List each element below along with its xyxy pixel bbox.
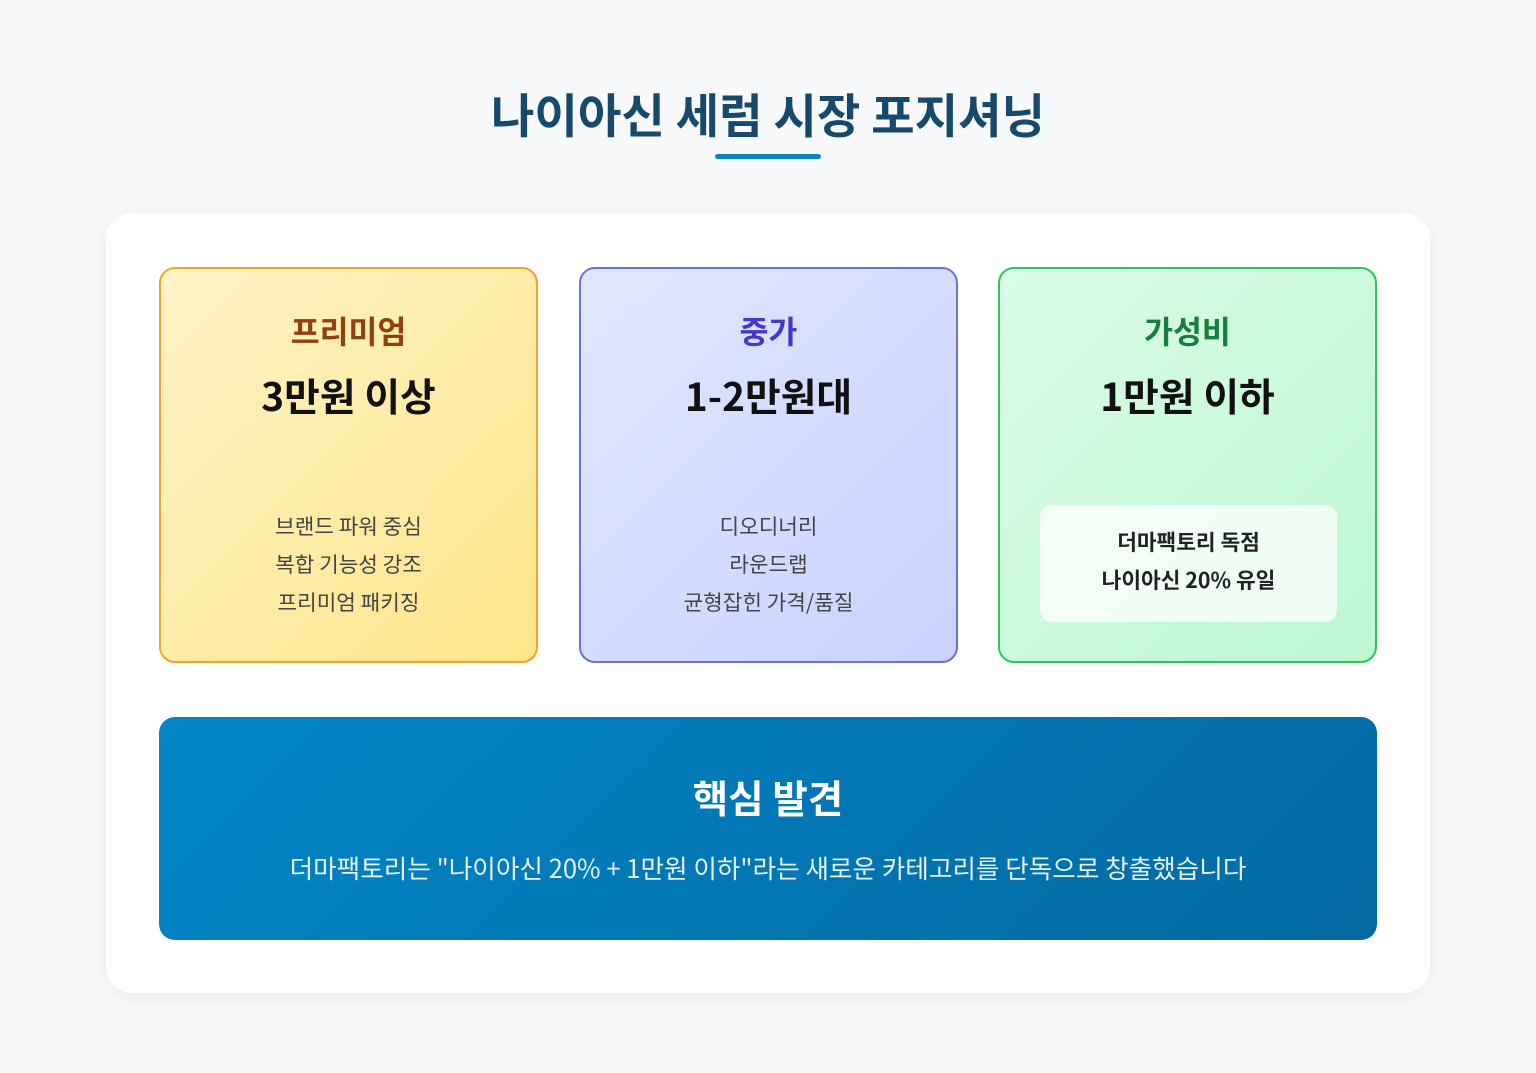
- card: premium: [159, 267, 538, 663]
- card: mid: 디오디너리: [720, 510, 817, 541]
- card: value: [998, 267, 1377, 663]
- banner: key finding: [159, 717, 1377, 940]
- card: premium: 프리미엄: [291, 308, 406, 353]
- card: premium: 프리미엄 패키징: [278, 586, 419, 617]
- title: 나이아신 세럼 시장 포지셔닝: [491, 78, 1045, 147]
- callout: exclusive: 더마팩토리 독점: [1117, 526, 1260, 557]
- card: premium: 3만원 이상: [261, 367, 436, 423]
- banner: key finding: 더마팩토리는 "나이아신 20% + 1만원 이하"라는 새로운 카테고리를 단독으로 창출했습니다: [290, 849, 1246, 886]
- card: value: 1만원 이하: [1100, 367, 1275, 423]
- card: mid: 중가: [740, 308, 797, 353]
- card: premium: 복합 기능성 강조: [275, 548, 422, 579]
- card: mid: 균형잡힌 가격/품질: [684, 586, 853, 617]
- card: value: 가성비: [1144, 308, 1231, 353]
- card: mid: [579, 267, 958, 663]
- callout: exclusive: 나이아신 20% 유일: [1102, 564, 1275, 595]
- callout: exclusive: [1040, 505, 1337, 622]
- card: mid: 라운드랩: [729, 548, 808, 579]
- card: mid: 1-2만원대: [685, 367, 852, 423]
- card: premium: 브랜드 파워 중심: [275, 510, 422, 541]
- panel: main: [106, 213, 1430, 993]
- banner: key finding: 핵심 발견: [693, 769, 843, 825]
